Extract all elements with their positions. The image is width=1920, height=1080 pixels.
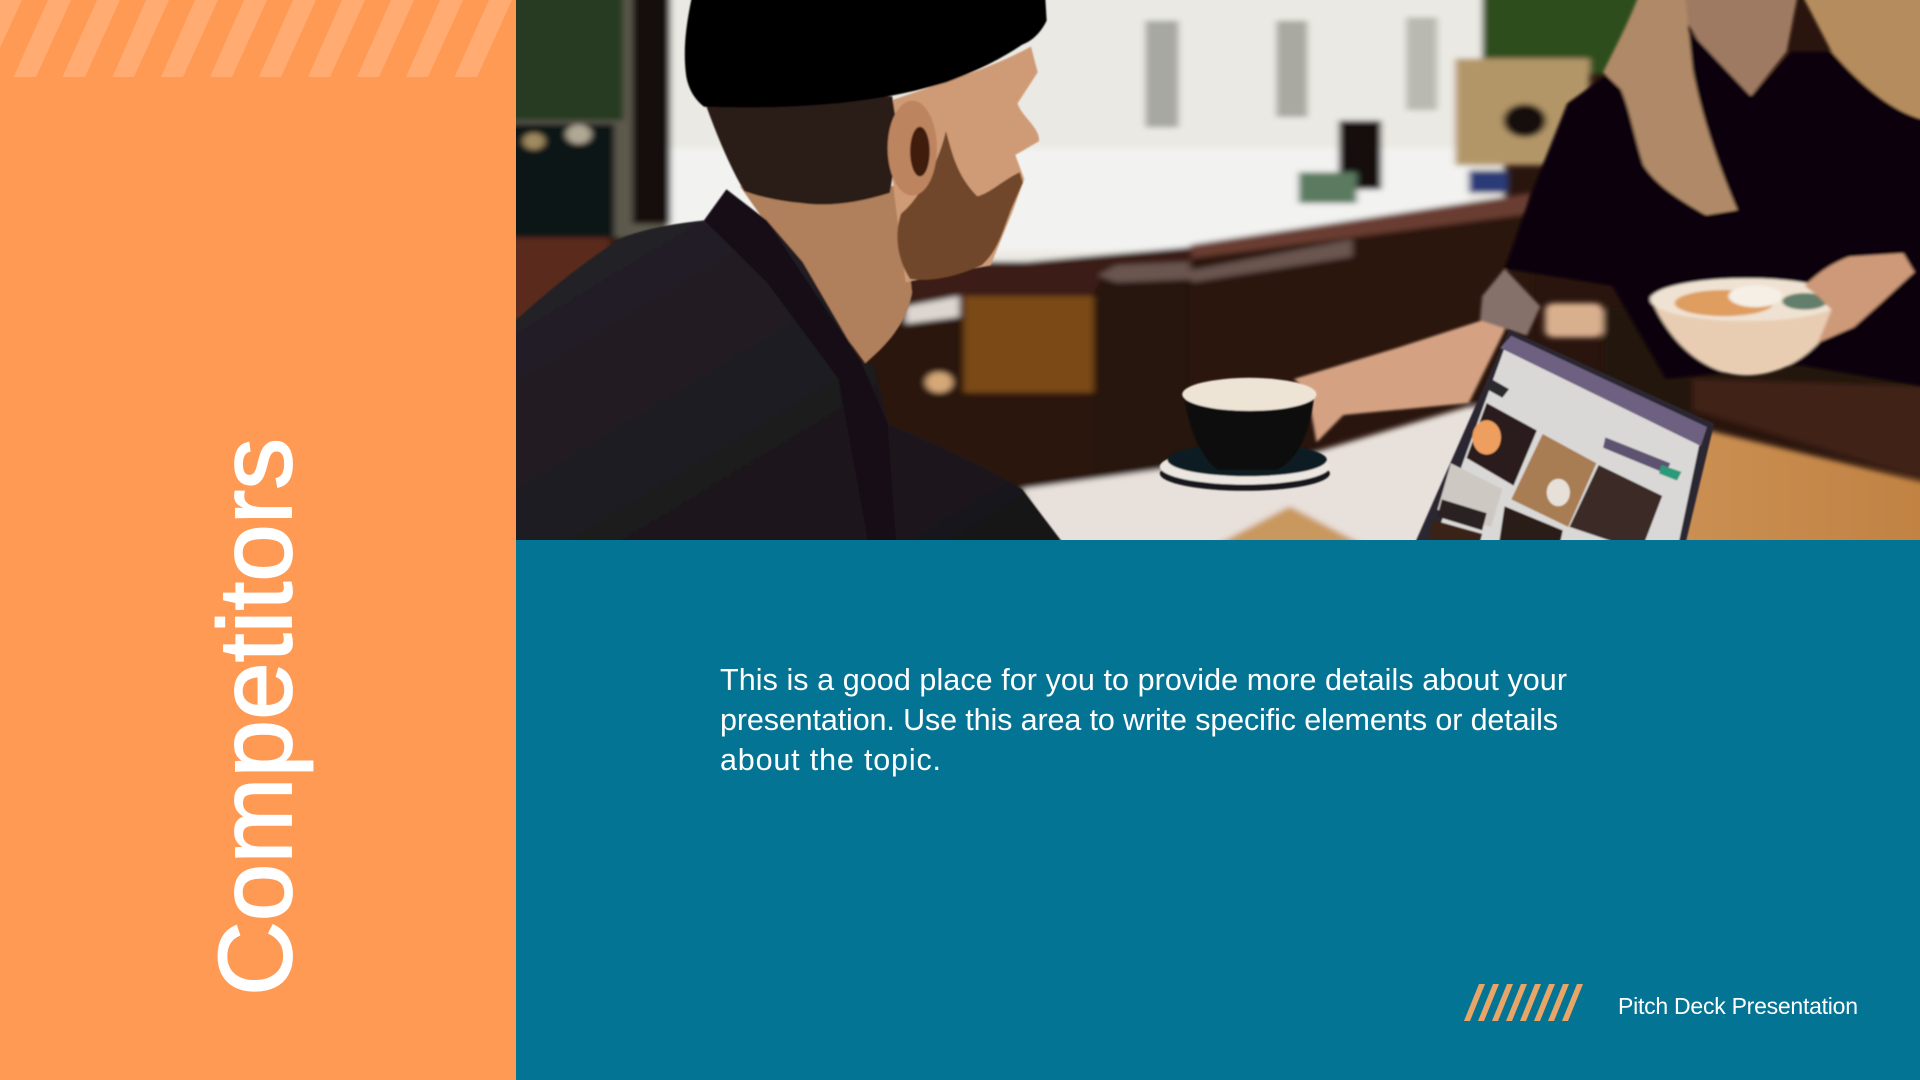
decorative stripe band xyxy=(0,0,512,77)
body text: about the topic. xyxy=(720,743,941,777)
neck xyxy=(1670,0,1800,96)
jacket xyxy=(516,189,1062,540)
arm xyxy=(1294,272,1505,443)
collar shade xyxy=(704,189,897,551)
hair xyxy=(704,96,899,204)
photo: laptop xyxy=(1411,330,1714,551)
tattoo xyxy=(1480,269,1540,336)
sweater xyxy=(1505,21,1920,396)
title: Competitors: Competitors xyxy=(198,438,314,996)
blonde hair left xyxy=(1603,0,1737,215)
photo background right xyxy=(1187,0,1920,540)
photo: man and woman at a cafe table xyxy=(516,0,1920,540)
blonde hair right xyxy=(1796,0,1920,119)
photo: woman, bowl, cup, laptop xyxy=(1294,0,1920,443)
beard xyxy=(897,131,1023,280)
photo background left xyxy=(516,0,1205,540)
body text xyxy=(720,663,1567,777)
photo: coffee cup xyxy=(1160,378,1330,491)
bowl xyxy=(1650,296,1843,375)
neck xyxy=(740,186,912,363)
hand xyxy=(1805,253,1914,343)
body text: presentation. Use this area to write specific elements or details xyxy=(720,703,1558,737)
footer icon: slashes xyxy=(1464,984,1583,1021)
ear xyxy=(888,101,937,196)
hat xyxy=(685,0,1047,108)
body text: This is a good place for you to provide more details about your xyxy=(720,663,1567,697)
panel: teal content area xyxy=(516,540,1920,1080)
footer label: Pitch Deck Presentation xyxy=(1618,993,1858,1019)
face xyxy=(883,46,1039,282)
panel: orange sidebar xyxy=(0,0,516,1080)
photo: man xyxy=(516,0,1062,540)
